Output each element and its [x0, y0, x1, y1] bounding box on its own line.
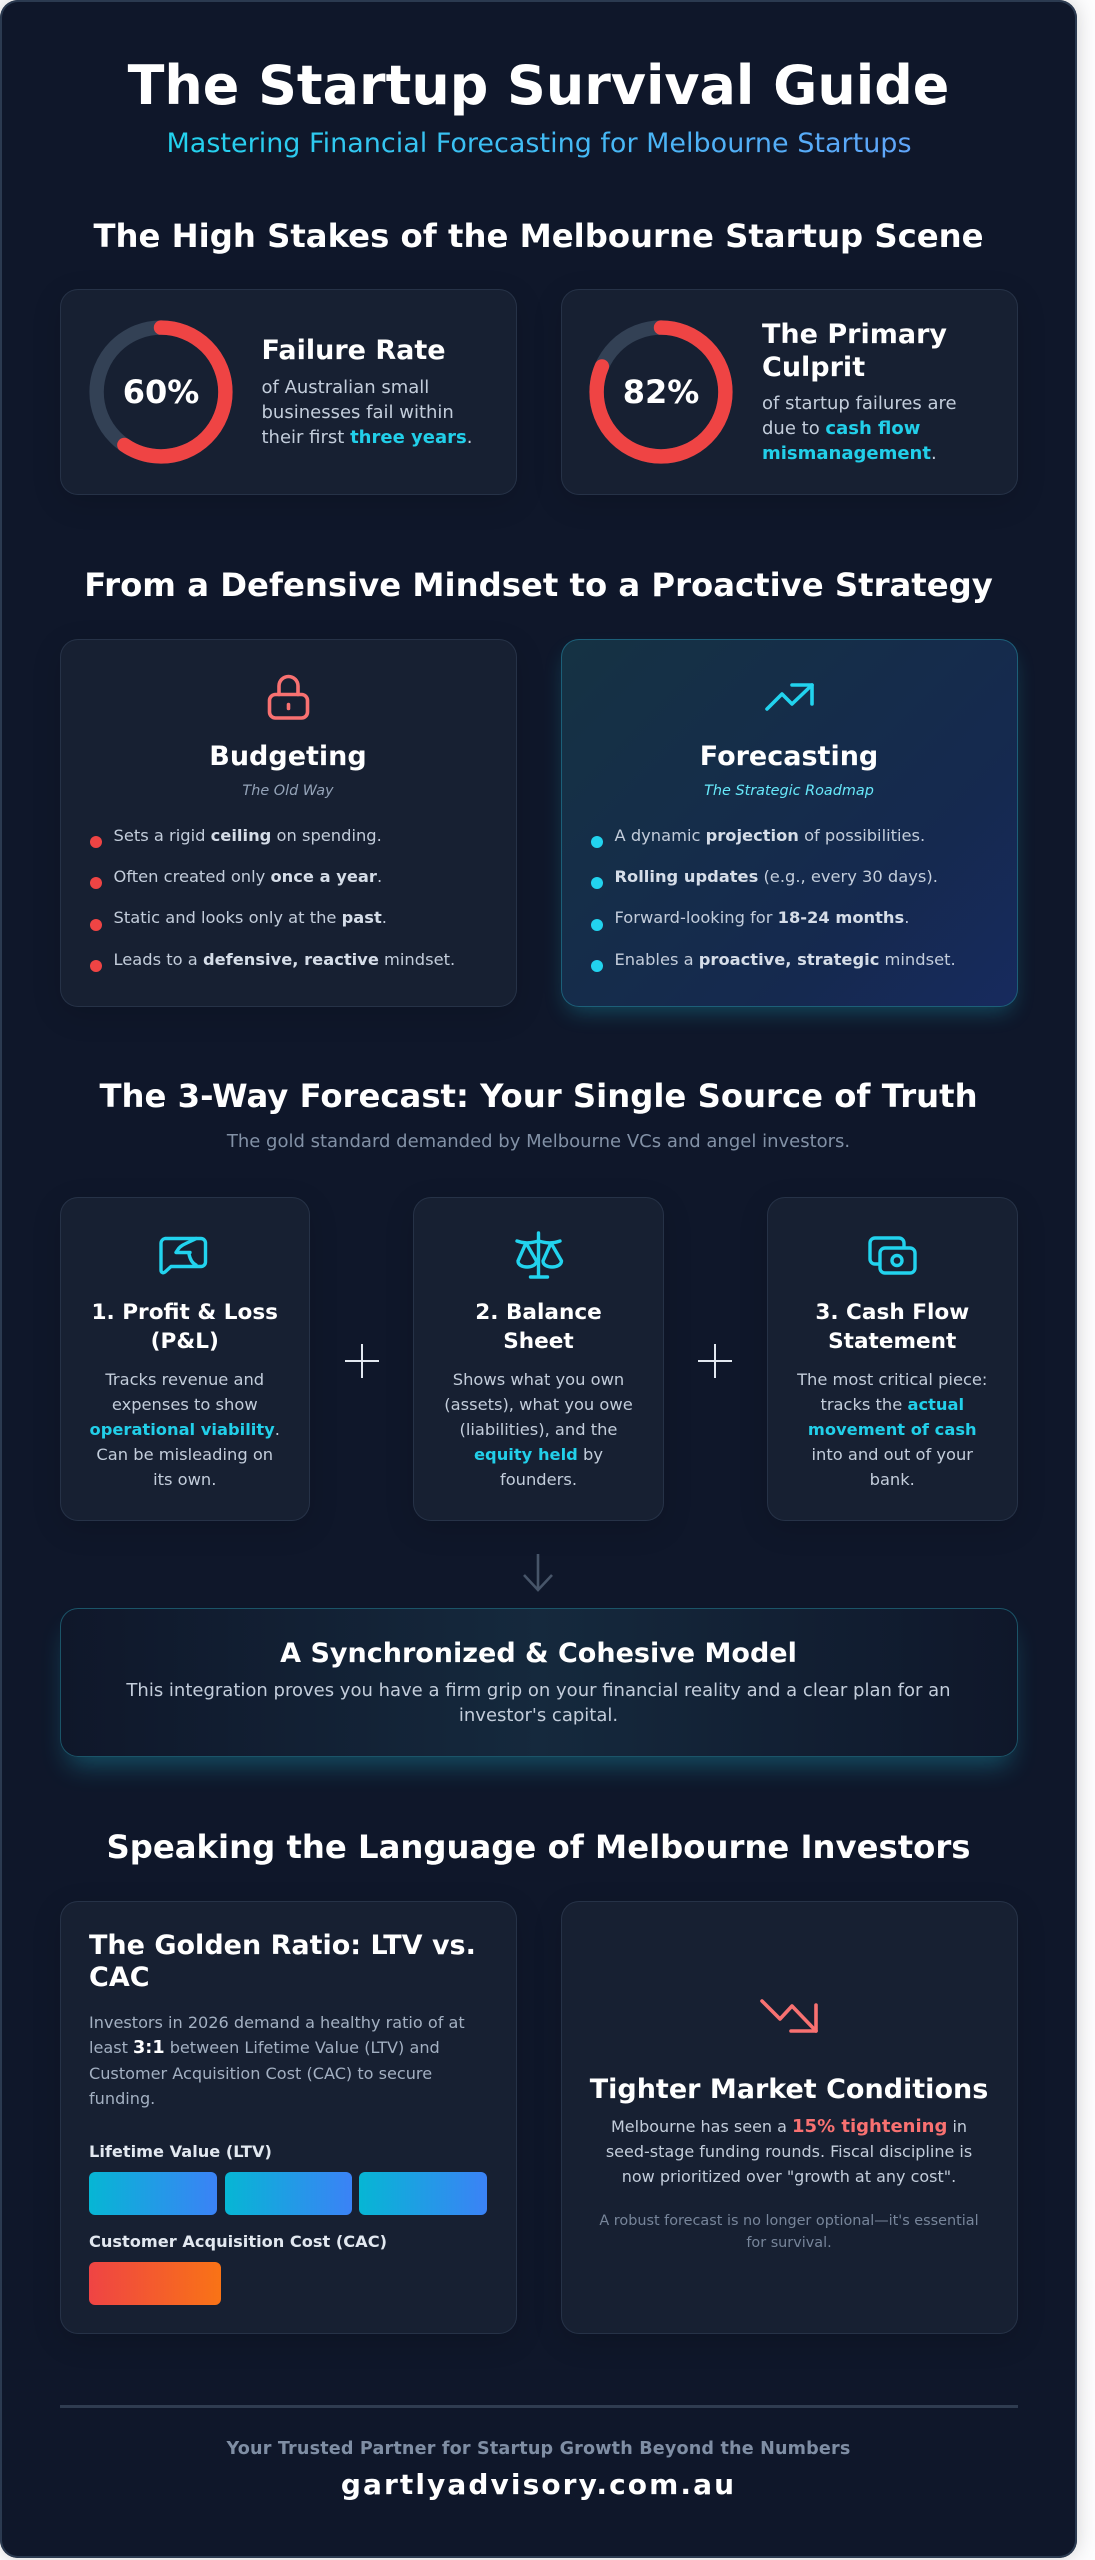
description: into and out of your — [812, 1445, 973, 1464]
icon: plus — [345, 1344, 379, 1378]
icon: trending up — [765, 683, 814, 711]
heading: balance sheet: 2. Balance — [475, 1300, 602, 1324]
heading: primary culprit: Culprit — [762, 352, 865, 382]
description — [90, 1370, 280, 1489]
description — [797, 1370, 987, 1489]
heading: mindset: From a Defensive Mindset to a Proactive Strategy — [84, 566, 993, 604]
description — [262, 376, 472, 448]
description: The most critical piece: — [797, 1370, 987, 1388]
donut chart: 82% — [589, 320, 733, 464]
footer — [60, 2405, 1018, 2501]
divider — [60, 2405, 1018, 2408]
heading: failure rate: Failure Rate — [262, 335, 446, 366]
panel: golden ratio — [60, 1901, 516, 2334]
heading: 3-way forecast: The 3-Way Forecast: Your Single Source of Truth — [99, 1077, 978, 1115]
bullet 4 — [590, 960, 602, 972]
section subtitle: The gold standard demanded by Melbourne VCs and angel investors. — [227, 1131, 850, 1152]
description: funding. — [89, 2089, 155, 2108]
description: This integration proves you have a firm grip on your financial reality and a clear plan for an — [126, 1680, 951, 1700]
icon: plus — [698, 1344, 732, 1378]
description: bank. — [870, 1470, 915, 1489]
description: due to cash flow — [762, 418, 920, 438]
tagline: The Old Way — [242, 783, 334, 799]
description: Melbourne has seen a 15% tightening in — [611, 2116, 967, 2136]
heading: primary culprit: The Primary — [762, 319, 947, 350]
panel: balance sheet — [413, 1197, 664, 1521]
description — [762, 392, 957, 464]
icon: lock — [268, 674, 310, 720]
description: Investors in 2026 demand a healthy ratio of at — [89, 2012, 465, 2032]
description: (liabilities), and the — [460, 1420, 617, 1439]
description: Tracks revenue and — [105, 1370, 264, 1388]
heading: cash flow — [815, 1300, 969, 1354]
description: Customer Acquisition Cost (CAC) to secure — [89, 2064, 432, 2083]
bullet 3 — [90, 918, 102, 930]
heading: golden ratio — [89, 1930, 476, 1993]
heading: budgeting: Budgeting — [209, 741, 367, 772]
panel: profit and loss — [60, 1197, 310, 1521]
heading: forecasting: Forecasting — [700, 741, 878, 772]
description — [89, 2012, 465, 2108]
heading: P&L: (P&L) — [151, 1328, 219, 1354]
description: expenses to show — [112, 1395, 258, 1414]
bar: LTV units — [89, 2172, 487, 2215]
label: CAC: Customer Acquisition Cost (CAC) — [89, 2232, 387, 2250]
note — [599, 2213, 979, 2251]
note: A robust forecast is no longer optional—it's essential — [599, 2213, 979, 2229]
list: forecasting traits — [591, 826, 956, 972]
heading: investors: Speaking the Language of Melbourne Investors — [106, 1828, 971, 1866]
bullet 3 — [590, 918, 602, 930]
description: of startup failures are — [762, 392, 957, 414]
panel: primary culprit — [560, 289, 1018, 495]
tagline: The Strategic Roadmap — [704, 783, 874, 799]
bullet 2 — [590, 877, 602, 889]
donut value: 82% — [623, 373, 699, 411]
footer url: gartlyadvisory.com.au — [341, 2468, 736, 2501]
panel: tighter market — [560, 1901, 1018, 2334]
description: Shows what you own — [453, 1370, 624, 1388]
icon: trending down — [760, 1999, 818, 2033]
bullet 1 — [590, 836, 602, 848]
donut chart: 60% — [90, 320, 233, 464]
description: movement of cash — [808, 1420, 977, 1439]
description: investor's capital. — [459, 1704, 618, 1726]
note: for survival. — [746, 2235, 832, 2251]
item 3: Forward-looking for 18-24 months. — [614, 908, 909, 927]
bullet 4 — [90, 960, 102, 972]
item 4: Enables a proactive, strategic mindset. — [614, 950, 956, 968]
title: The Startup Survival Guide — [128, 54, 949, 117]
heading: golden ratio: The Golden Ratio: LTV vs. — [89, 1930, 476, 1961]
icon: scales — [515, 1231, 564, 1279]
item 2: Rolling updates (e.g., every 30 days). — [614, 867, 938, 886]
panel: failure rate — [60, 289, 516, 495]
panel: cash flow — [767, 1197, 1018, 1521]
heading: cash flow: 3. Cash Flow — [815, 1300, 969, 1324]
donut value: 60% — [123, 373, 199, 411]
description: of Australian small — [262, 376, 429, 398]
description: founders. — [500, 1470, 577, 1489]
description: its own. — [153, 1470, 216, 1489]
heading: tighter market: Tighter Market Conditions — [590, 2074, 988, 2105]
item 4: Leads to a defensive, reactive mindset. — [114, 950, 455, 968]
description: least 3:1 between Lifetime Value (LTV) and — [89, 2038, 440, 2058]
description: seed-stage funding rounds. Fiscal discipline is — [606, 2142, 972, 2161]
description: businesses fail within — [262, 402, 454, 422]
arrow: down — [523, 1554, 553, 1592]
heading: balance sheet: Sheet — [503, 1328, 574, 1354]
description: operational viability. — [90, 1420, 280, 1439]
bullet 1 — [90, 836, 102, 848]
heading: high stakes: The High Stakes of the Melbourne Startup Scene — [93, 217, 984, 255]
panel: budgeting — [60, 639, 516, 1006]
description — [126, 1680, 951, 1726]
item 3: Static and looks only at the past. — [114, 908, 387, 927]
heading: model: A Synchronized & Cohesive Model — [280, 1638, 797, 1669]
description: mismanagement. — [762, 442, 937, 464]
subtitle: Mastering Financial Forecasting for Melbourne Startups — [166, 128, 912, 159]
heading: cash flow: Statement — [828, 1328, 956, 1354]
description: their first three years. — [262, 426, 472, 448]
heading: balance sheet — [475, 1300, 602, 1354]
description: tracks the actual — [820, 1395, 964, 1414]
panel: synchronized model — [60, 1608, 1018, 1757]
bullet 2 — [90, 877, 102, 889]
icon: cash — [868, 1236, 917, 1275]
heading: golden ratio: CAC — [89, 1962, 150, 1993]
heading: P&L: 1. Profit & Loss — [91, 1300, 278, 1324]
description — [606, 2116, 972, 2186]
unit 2 — [224, 2172, 352, 2214]
description: Can be misleading on — [96, 1445, 273, 1464]
description: equity held by — [474, 1445, 603, 1464]
icon: chat with dollar — [159, 1236, 208, 1274]
heading: primary culprit — [762, 319, 947, 382]
item 2: Often created only once a year. — [114, 867, 382, 886]
unit 3 — [359, 2172, 487, 2214]
bar: CAC unit — [89, 2262, 221, 2304]
panel: forecasting — [560, 639, 1018, 1006]
unit 1 — [89, 2172, 217, 2214]
item 1: Sets a rigid ceiling on spending. — [114, 826, 382, 844]
list: budgeting traits — [90, 826, 455, 972]
item 1: A dynamic projection of possibilities. — [614, 826, 925, 844]
heading: P&L — [91, 1300, 278, 1354]
footer tagline: Your Trusted Partner for Startup Growth Beyond the Numbers — [226, 2439, 850, 2459]
label: LTV: Lifetime Value (LTV) — [89, 2142, 272, 2161]
description: (assets), what you owe — [444, 1395, 633, 1414]
description: now prioritized over "growth at any cost". — [622, 2167, 956, 2186]
description — [444, 1370, 633, 1489]
